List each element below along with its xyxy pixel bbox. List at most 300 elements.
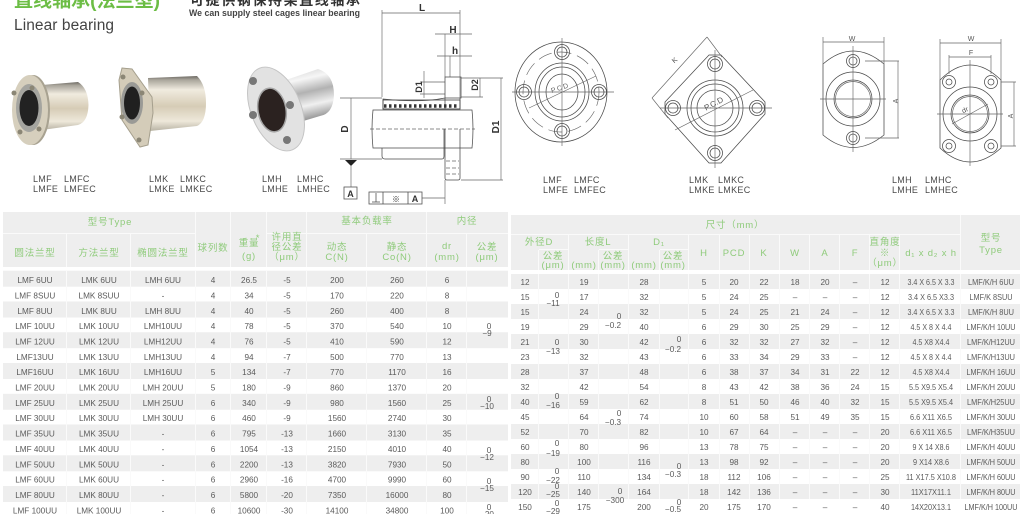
- left table rows: 770: [390, 353, 404, 362]
- left table rows: 460: [242, 414, 256, 423]
- right table rows: 6: [702, 368, 707, 377]
- right table rows: 5: [702, 308, 707, 317]
- left table rows: 134: [242, 368, 256, 377]
- right table header text: D₁: [653, 237, 665, 248]
- right table rows: 15: [880, 413, 890, 422]
- left table rows: 94: [244, 353, 254, 362]
- left table rows: LMK 80UU: [79, 491, 119, 500]
- right table rows: 21: [790, 308, 800, 317]
- left table rows: 30: [442, 414, 452, 423]
- left table rows: 6: [445, 276, 450, 285]
- right table outer diameter tolerances: 0: [555, 499, 560, 508]
- right table rows: 19: [520, 323, 530, 332]
- left table rows: LMF 20UU: [15, 384, 55, 392]
- left table rows: LMF 60UU: [15, 476, 55, 485]
- right table rows: 43: [639, 353, 649, 362]
- diagram: LMH oval flange view, A dimension: W: [849, 36, 856, 43]
- right table rows: 23: [520, 353, 530, 362]
- right table rows: –: [853, 353, 858, 362]
- left table rows: LMK 30UU: [79, 414, 119, 423]
- right table rows: –: [853, 443, 858, 452]
- right table rows: 14X20X13.1: [911, 503, 951, 512]
- right table rows: LMF/K/H 60UU: [966, 473, 1016, 482]
- left table rows: LMK 20UU: [79, 384, 119, 392]
- right table rows: –: [823, 503, 828, 512]
- right table rows: –: [853, 338, 858, 347]
- right table rows: 18: [699, 473, 709, 482]
- right table length tolerances: −300: [606, 496, 625, 505]
- right table rows: 11X17X11.1: [911, 488, 951, 497]
- right table outer diameter tolerances: −13: [546, 347, 560, 356]
- right table rows: 24: [579, 308, 589, 317]
- left table header text: 径公差: [272, 241, 302, 253]
- right table rows: 106: [757, 473, 771, 482]
- left table rows: 34: [244, 291, 254, 300]
- left table rows: 6: [211, 491, 216, 500]
- left table rows: LMF 6UU: [17, 276, 53, 285]
- left table rows: 795: [242, 430, 256, 439]
- left table rows: 1170: [388, 368, 406, 377]
- right table rows: 4.5 X 8 X 4.4: [910, 323, 952, 332]
- right table rows: –: [793, 473, 798, 482]
- left table rows: LMK 13UU: [79, 353, 119, 362]
- right table rows: –: [853, 473, 858, 482]
- left table rows: 1370: [388, 384, 407, 392]
- right table rows: 34: [759, 353, 769, 362]
- left table rows: -: [162, 430, 165, 439]
- right table rows: 28: [639, 278, 649, 287]
- left table rows: LMK 35UU: [79, 430, 119, 439]
- right table flange diameter tolerances: 0: [677, 462, 682, 471]
- right table rows: –: [823, 473, 828, 482]
- left table rows: 7930: [388, 460, 407, 469]
- labels: LMF photo models: LMFC: [64, 174, 90, 184]
- left table rows: -5: [283, 322, 291, 331]
- diagram: LMH oval flange view, F dimension: dr: [961, 106, 970, 115]
- right table rows: 18: [790, 278, 800, 287]
- right table rows: 29: [729, 323, 739, 332]
- title: Linear bearing: Linear bearing: [14, 17, 114, 34]
- right table rows: 24: [729, 293, 739, 302]
- right table rows: LMF/K/H 40UU: [966, 443, 1016, 452]
- diagram: LMK square flange front view: P.C.D: [703, 95, 725, 113]
- right table header text: (mm): [631, 260, 657, 271]
- right table rows: –: [793, 458, 798, 467]
- right table rows: 34: [790, 368, 800, 377]
- left table rows: LMF 30UU: [15, 414, 55, 423]
- right table rows: 6.6 X11 X6.5: [910, 413, 952, 422]
- left table rows: LMF16UU: [16, 368, 54, 377]
- right table rows: 38: [729, 368, 739, 377]
- right table rows: 74: [639, 413, 649, 422]
- left table header text: 方法兰型: [78, 247, 120, 259]
- right table rows: –: [793, 503, 798, 512]
- right table rows: 12: [520, 278, 530, 287]
- right table header background: [511, 215, 1020, 270]
- left table rows: LMH 30UU: [143, 414, 183, 423]
- right table rows: 40: [639, 323, 649, 332]
- left table rows: 170: [330, 291, 344, 300]
- left table rows: 20: [442, 384, 452, 392]
- right table rows: –: [853, 488, 858, 497]
- right table rows: 32: [820, 338, 830, 347]
- labels: LMK photo models: LMKC: [180, 174, 206, 184]
- left table rows: -5: [283, 276, 291, 285]
- left table rows: 770: [330, 368, 344, 377]
- right table flange diameter tolerances: [665, 335, 682, 514]
- left table rows: -: [162, 460, 165, 469]
- left table rows: -13: [281, 445, 293, 454]
- right table header text: PCD: [723, 248, 745, 259]
- left table header text: C(N): [325, 252, 349, 263]
- left table rows: 6: [211, 460, 216, 469]
- labels: LMH drawing models: LMHE: [892, 185, 918, 195]
- left table rows: LMH16UU: [144, 368, 182, 377]
- diagram: section view with dimensions: D1: [491, 120, 502, 133]
- right table rows: 12: [880, 338, 890, 347]
- left table rows: 2740: [388, 414, 407, 423]
- left table rows: -7: [283, 368, 291, 377]
- right table rows: 35: [850, 413, 860, 422]
- left table rows: LMK 10UU: [79, 322, 119, 331]
- right table header text: 外径D: [525, 236, 553, 248]
- right table header text: 长度L: [585, 236, 611, 248]
- right table rows: 3.4 X 6.5 X 3.3: [908, 278, 955, 287]
- labels: LMF photo models: LMFEC: [64, 184, 96, 194]
- right table rows: 3.4 X 6.5 X 3.3: [908, 308, 955, 317]
- right table rows: –: [853, 323, 858, 332]
- labels: LMK drawing models: LMKC: [718, 175, 744, 185]
- right table header text: d₁ x d₂ x h: [905, 248, 957, 259]
- right table rows: LMF/K/H 20UU: [966, 383, 1016, 392]
- photo: LMH oval flange bearing: [236, 59, 334, 159]
- right table rows: 6: [702, 323, 707, 332]
- left table rows: LMF 8UU: [17, 307, 53, 316]
- left table rows: 6: [211, 445, 216, 454]
- right table rows: 70: [579, 428, 589, 437]
- right table rows: 30: [880, 488, 890, 497]
- right table rows: 116: [637, 458, 651, 467]
- left table rows: 80: [442, 491, 452, 500]
- right table length tolerances: −0.3: [605, 418, 622, 427]
- right table rows: –: [853, 458, 858, 467]
- left table rows: 500: [330, 353, 344, 362]
- left table rows: -5: [283, 291, 291, 300]
- right table rows: –: [853, 503, 858, 512]
- right table rows: 20: [880, 428, 890, 437]
- left table rows: LMK 40UU: [79, 445, 119, 454]
- right table header text: W: [790, 248, 800, 259]
- labels: LMK photo models: LMKE: [149, 184, 175, 194]
- right table rows: –: [823, 488, 828, 497]
- right table rows: LMF/K/H 50UU: [966, 458, 1016, 467]
- right table rows: 31: [820, 368, 830, 377]
- right table rows: 6: [702, 338, 707, 347]
- left table rows: LMH 25UU: [143, 399, 183, 408]
- right table flange diameter tolerances: 0: [677, 498, 682, 507]
- labels: LMF drawing models: LMFE: [543, 185, 568, 195]
- left table rows: 2960: [240, 476, 259, 485]
- right table header text: ※: [880, 248, 890, 259]
- right table rows: 20: [880, 443, 890, 452]
- right table flange diameter tolerances: −0.2: [665, 345, 682, 354]
- photo: LMF round flange bearing: [12, 75, 88, 145]
- right table rows: 37: [579, 368, 589, 377]
- right table rows: 25: [880, 473, 890, 482]
- right table rows: 51: [790, 413, 800, 422]
- right table header text: (mm): [571, 260, 597, 271]
- right table rows: 67: [729, 428, 739, 437]
- labels: LMH drawing models: [892, 175, 958, 195]
- labels: LMH photo models: LMHC: [297, 174, 324, 184]
- labels: LMF drawing models: [543, 175, 606, 195]
- right table rows: 38: [790, 383, 800, 392]
- right table flange diameter tolerances: 0: [677, 335, 682, 344]
- right table rows: 25: [790, 323, 800, 332]
- right table outer diameter tolerances: −19: [546, 449, 560, 458]
- labels: LMF drawing models: LMF: [543, 175, 562, 185]
- right table rows: 24: [850, 383, 860, 392]
- right table rows: 100: [577, 458, 591, 467]
- right table rows: –: [823, 443, 828, 452]
- right table rows: 30: [759, 323, 769, 332]
- right table rows: 20: [820, 278, 830, 287]
- right table rows: 48: [639, 368, 649, 377]
- right table rows: 58: [759, 413, 769, 422]
- diagram: LMH oval flange view, F dimension: A: [1008, 113, 1015, 118]
- right table rows: 12: [880, 323, 890, 332]
- left table rows: 860: [330, 384, 344, 392]
- left table rows: 2150: [328, 445, 347, 454]
- diagram: LMH oval flange view, A dimension: A: [893, 98, 900, 103]
- left table header text: 圆法兰型: [14, 247, 56, 259]
- right table header text: 型号: [981, 233, 1001, 244]
- left table rows: LMF 12UU: [15, 338, 55, 346]
- right table header text: (mm): [660, 260, 686, 271]
- left table rows: LMF 80UU: [15, 491, 55, 500]
- right table rows: 5.5 X9.5 X5.4: [909, 383, 953, 392]
- left table rows: -5: [283, 338, 291, 346]
- right table rows: 64: [759, 428, 769, 437]
- labels: LMH photo models: LMHEC: [297, 184, 330, 194]
- right table rows: 40: [820, 398, 830, 407]
- left table rows: -20: [281, 491, 293, 500]
- left table rows: LMK 16UU: [79, 368, 119, 377]
- diagram: section view with dimensions: A: [347, 189, 354, 199]
- left table rows: LMK 8SUU: [79, 291, 120, 300]
- right table rows: 49: [820, 413, 830, 422]
- left table rows: LMK 50UU: [79, 460, 119, 469]
- diagram: LMH oval flange view, F dimension: F: [969, 50, 973, 57]
- labels: LMH photo models: LMH: [262, 174, 282, 184]
- right table rows: 80: [579, 443, 589, 452]
- right table header text: （μm）: [867, 257, 903, 269]
- left table bore tolerances: 0: [487, 322, 492, 331]
- left table rows: LMH 6UU: [145, 276, 181, 285]
- right table header text: A: [821, 248, 829, 259]
- left table header text: 内径: [457, 215, 477, 227]
- right table rows: 110: [577, 473, 591, 482]
- right table rows: 32: [759, 338, 769, 347]
- left table rows: 180: [242, 384, 256, 392]
- labels: LMK photo models: LMK: [149, 174, 168, 184]
- right table outer diameter tolerances: [546, 291, 560, 514]
- diagram: section view with dimensions: [340, 3, 503, 204]
- right table rows: LMF/K/H 10UU: [966, 323, 1016, 332]
- left table rows: LMK 6UU: [81, 276, 117, 285]
- right table rows: 4.5 X8 X4.4: [912, 368, 950, 377]
- left table rows: 370: [330, 322, 344, 331]
- right table rows: 12: [880, 368, 890, 377]
- left table rows: -16: [281, 476, 293, 485]
- right table rows: –: [793, 443, 798, 452]
- left table bore tolerances: −10: [480, 402, 494, 411]
- diagram: section view with dimensions: D1: [414, 81, 424, 93]
- left table rows: -9: [283, 414, 291, 423]
- right table rows: 40: [520, 398, 530, 407]
- right table rows: 12: [880, 353, 890, 362]
- right table rows: 21: [520, 338, 530, 347]
- right table rows: 96: [639, 443, 649, 452]
- left table header text: 球列数: [198, 242, 228, 254]
- right table rows: 25: [759, 308, 769, 317]
- right table header text: 直角度: [870, 236, 900, 248]
- labels: LMK photo models: LMKEC: [180, 184, 213, 194]
- right table outer diameter tolerances: −25: [546, 490, 560, 499]
- left table rows: -: [162, 491, 165, 500]
- right table rows: 6: [702, 353, 707, 362]
- left table rows: LMK 25UU: [79, 399, 119, 408]
- left table rows: 590: [390, 338, 404, 346]
- left table bore tolerances: −9: [482, 329, 492, 338]
- right table rows: 60: [729, 413, 739, 422]
- diagram: section view with dimensions: A: [412, 194, 419, 204]
- labels: LMH drawing models: LMHEC: [925, 185, 958, 195]
- right table rows: 98: [729, 458, 739, 467]
- labels: LMH drawing models: LMH: [892, 175, 912, 185]
- left table rows: 4700: [328, 476, 347, 485]
- right table outer diameter tolerances: 0: [555, 291, 560, 300]
- left table rows: 4: [211, 353, 216, 362]
- right table outer diameter tolerances: 0: [555, 338, 560, 347]
- left table header text: Co(N): [382, 252, 412, 263]
- right table rows: 52: [520, 428, 530, 437]
- right table rows: 78: [729, 443, 739, 452]
- left table bore tolerances: −12: [480, 453, 494, 462]
- left table header text: 椭圆法兰型: [137, 247, 189, 259]
- left table bore tolerances: 0: [487, 503, 492, 512]
- right table rows: 32: [639, 293, 649, 302]
- right table header text: F: [852, 248, 858, 259]
- left table rows: 400: [390, 307, 404, 316]
- right table header text: 公差: [603, 250, 623, 262]
- right table rows: [518, 278, 1018, 512]
- right table rows: 12: [880, 278, 890, 287]
- diagram: section view with dimensions: ※: [392, 195, 400, 204]
- right table rows: LMF/K/H13UU: [967, 353, 1015, 362]
- right table rows: 42: [759, 383, 769, 392]
- right table outer diameter tolerances: 0: [555, 439, 560, 448]
- right table rows: –: [853, 293, 858, 302]
- right table rows: –: [823, 458, 828, 467]
- diagram: LMH oval flange view, A dimension: [820, 36, 900, 152]
- right table rows: 32: [850, 398, 860, 407]
- right table rows: 10: [699, 428, 709, 437]
- right table header text: 公差: [543, 250, 563, 262]
- right table rows: 40: [880, 503, 890, 512]
- right table rows: 29: [579, 323, 589, 332]
- right table rows: 75: [759, 443, 769, 452]
- right table rows: LMF/K 8SUU: [970, 293, 1013, 302]
- left table rows: LMF 8SUU: [15, 291, 55, 300]
- labels: LMH drawing models: LMHC: [925, 175, 952, 185]
- left table rows: LMH 8UU: [145, 307, 181, 316]
- labels: LMK drawing models: LMKEC: [718, 185, 751, 195]
- diagram: LMF round flange front view: PCD: [550, 82, 571, 95]
- right table rows: 112: [727, 473, 741, 482]
- labels: LMK drawing models: [689, 175, 751, 195]
- right table rows: 140: [577, 488, 591, 497]
- left table rows: 35: [442, 430, 452, 439]
- right table rows: 62: [639, 398, 649, 407]
- right table rows: 50: [759, 398, 769, 407]
- right table rows: 200: [637, 503, 651, 512]
- left table rows: 78: [244, 322, 254, 331]
- right table rows: –: [823, 293, 828, 302]
- right table rows: 59: [579, 398, 589, 407]
- right table rows: 175: [577, 503, 591, 512]
- left table header text: 静态: [387, 241, 407, 253]
- right table rows: 43: [729, 383, 739, 392]
- left table rows: 26.5: [241, 276, 257, 285]
- left table rows: LMH 20UU: [143, 384, 183, 392]
- right table outer diameter tolerances: 0: [555, 482, 560, 491]
- left table rows: 16000: [386, 491, 409, 500]
- right table rows: –: [793, 428, 798, 437]
- left table rows: LMH10UU: [144, 322, 182, 331]
- left table bore tolerances: 0: [487, 446, 492, 455]
- left table rows: 980: [330, 399, 344, 408]
- right table rows: 32: [729, 338, 739, 347]
- labels: LMH photo models: LMHE: [262, 184, 288, 194]
- right table rows: 175: [727, 503, 741, 512]
- left table bore tolerances: 0: [487, 477, 492, 486]
- left table rows: LMF13UU: [16, 353, 54, 362]
- left table rows: 25: [442, 399, 452, 408]
- left table rows: 8: [445, 291, 450, 300]
- right table row bands: [511, 274, 1020, 499]
- right table rows: 22: [850, 368, 860, 377]
- right table rows: 10: [699, 413, 709, 422]
- left table rows: 6: [211, 476, 216, 485]
- right table rows: 32: [639, 308, 649, 317]
- left table rows: 260: [330, 307, 344, 316]
- left table bore tolerances: [480, 322, 494, 514]
- right table rows: 20: [880, 458, 890, 467]
- right table rows: –: [823, 428, 828, 437]
- left table rows: 220: [390, 291, 404, 300]
- left table rows: 8: [445, 307, 450, 316]
- right table rows: 8: [702, 383, 707, 392]
- right table rows: 92: [759, 458, 769, 467]
- right table rows: 134: [637, 473, 651, 482]
- right table rows: 45: [520, 413, 530, 422]
- left table header text: (mm): [434, 252, 460, 263]
- right table header text: K: [760, 248, 768, 259]
- left table header text: (g): [242, 251, 256, 262]
- right table outer diameter tolerances: 0: [555, 392, 560, 401]
- right table header text: 尺寸（mm）: [706, 219, 764, 231]
